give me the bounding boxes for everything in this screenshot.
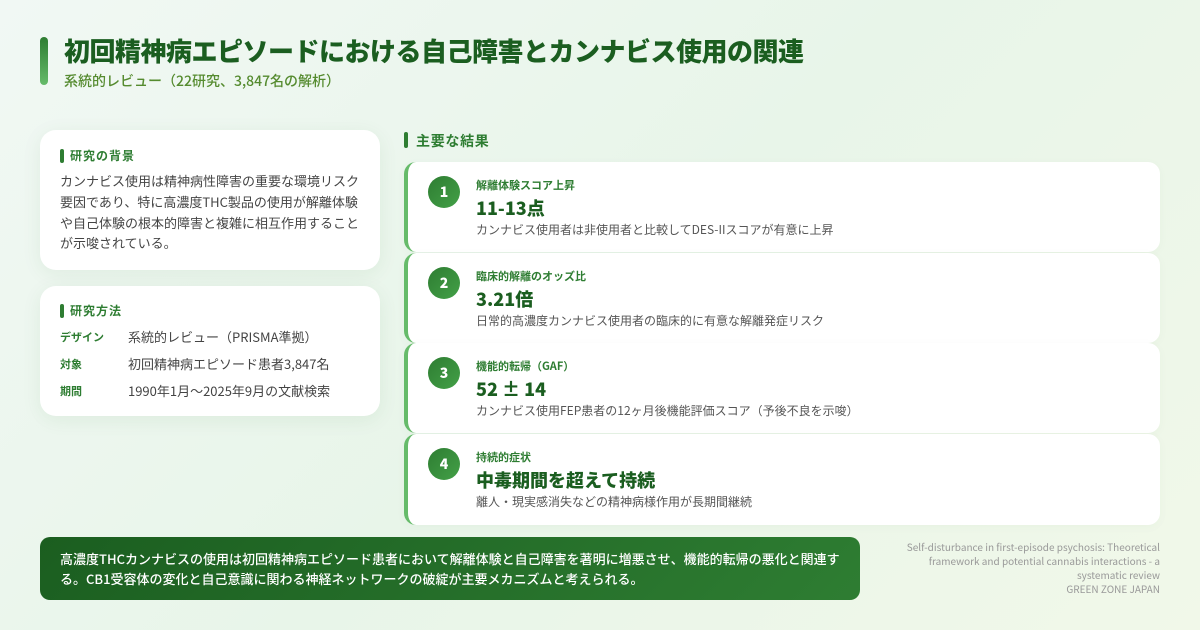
method label: period: 期間 bbox=[60, 383, 82, 399]
panel: research background bbox=[40, 130, 380, 270]
number badge 3: 3 bbox=[440, 363, 448, 383]
method label: design: デザイン bbox=[60, 329, 104, 345]
result card 1 bbox=[404, 162, 1160, 252]
number badge 3 bbox=[428, 357, 460, 389]
heading: research methods: 研究方法 bbox=[70, 302, 122, 319]
method label: subjects: 対象 bbox=[60, 356, 82, 372]
result label 1: 解離体験スコア上昇 bbox=[476, 177, 575, 193]
result value 4: 中毒期間を超えて持続 bbox=[476, 467, 655, 493]
panel: research methods bbox=[40, 286, 380, 416]
result value 3: 52 ± 14 bbox=[476, 376, 546, 402]
result description 1: カンナビス使用者は非使用者と比較してDES-IIスコアが有意に上昇 bbox=[476, 221, 834, 238]
method value: period: 1990年1月〜2025年9月の文献検索 bbox=[128, 381, 330, 400]
result value 1: 11-13点 bbox=[476, 195, 545, 221]
conclusion banner: 高濃度THCカンナビスの使用は初回精神病エピソード患者において解離体験と自己障害を著明に増悪させ、機能的転帰の悪化と関連する。CB1受容体の変化と自己意識に関わる神経ネットワークの破綻が主要メカニズムと考えられる。 bbox=[60, 549, 840, 588]
number badge 2: 2 bbox=[440, 273, 448, 293]
heading: main results: 主要な結果 bbox=[416, 131, 490, 151]
result card 4 bbox=[404, 434, 1160, 525]
number badge 4: 4 bbox=[440, 454, 448, 474]
number badge 4 bbox=[428, 448, 460, 480]
result label 4: 持続的症状 bbox=[476, 449, 531, 465]
result description 3: カンナビス使用FEP患者の12ヶ月後機能評価スコア（予後不良を示唆） bbox=[476, 402, 859, 419]
result description 2: 日常的高濃度カンナビス使用者の臨床的に有意な解離発症リスク bbox=[476, 312, 824, 329]
result label 2: 臨床的解離のオッズ比 bbox=[476, 268, 586, 284]
subtitle: 系統的レビュー（22研究、3,847名の解析） bbox=[64, 71, 340, 91]
result card 2 bbox=[404, 253, 1160, 343]
source citation: Self-disturbance in first-episode psychosis: Theoretical framework and potential cannabis interactions - a systematic review bbox=[907, 539, 1160, 582]
method value: design: 系統的レビュー（PRISMA準拠） bbox=[128, 327, 318, 346]
number badge 1: 1 bbox=[440, 182, 448, 202]
number badge 2 bbox=[428, 267, 460, 299]
title accent bar bbox=[40, 37, 48, 85]
method value: subjects: 初回精神病エピソード患者3,847名 bbox=[128, 354, 329, 373]
result description 4: 離人・現実感消失などの精神病様作用が長期間継続 bbox=[476, 493, 752, 510]
result value 2: 3.21倍 bbox=[476, 286, 533, 312]
result label 3: 機能的転帰（GAF） bbox=[476, 358, 574, 374]
conclusion banner bbox=[40, 537, 860, 600]
title: 初回精神病エピソードにおける自己障害とカンナビス使用の関連 bbox=[64, 32, 804, 69]
result card 3 bbox=[404, 343, 1160, 433]
source citation: GREEN ZONE JAPAN bbox=[1066, 581, 1160, 596]
number badge 1 bbox=[428, 176, 460, 208]
heading: research background: 研究の背景 bbox=[70, 147, 135, 164]
text: background body: カンナビス使用は精神病性障害の重要な環境リスク要因であり、特に高濃度THC製品の使用が解離体験や自己体験の根本的障害と複雑に相互作用することが示唆されている。 bbox=[60, 171, 359, 252]
